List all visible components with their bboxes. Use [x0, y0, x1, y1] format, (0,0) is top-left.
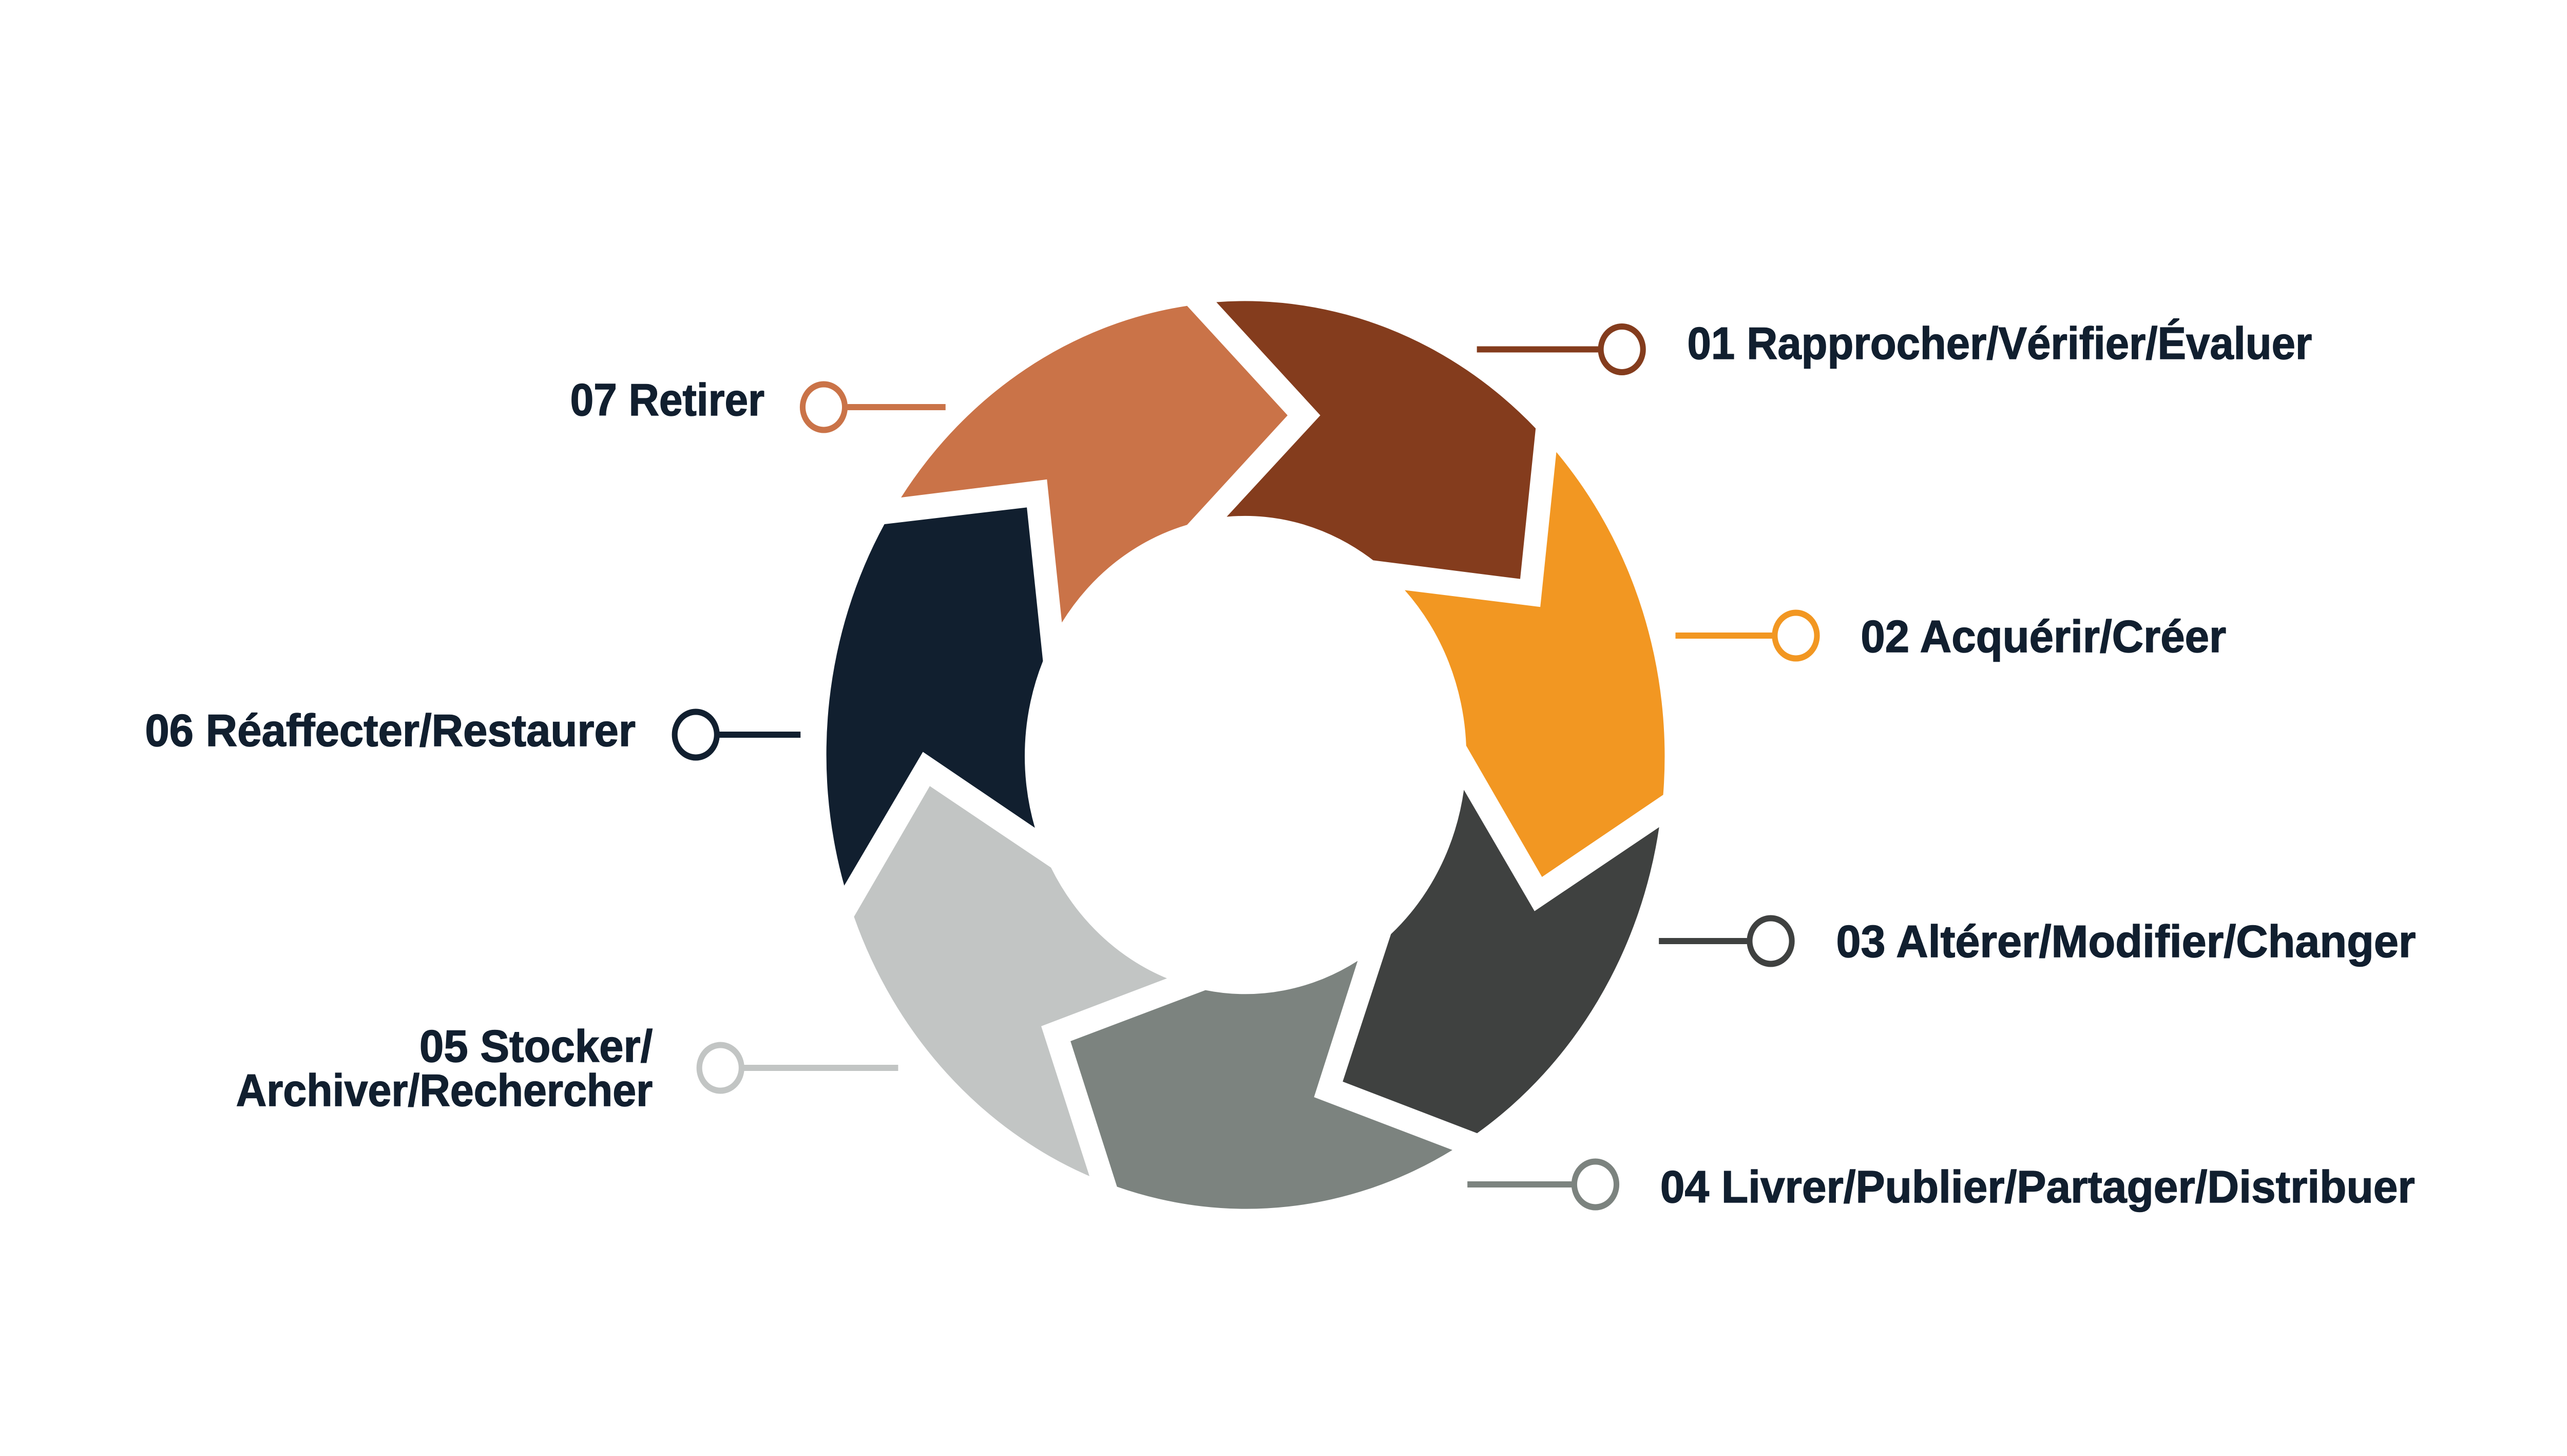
- label 03: 03 Altérer/Modifier/Changer: [1836, 916, 2416, 967]
- label 05: [236, 1021, 653, 1116]
- callout 06 connector: [675, 712, 800, 758]
- label 01: 01 Rapprocher/Vérifier/Évaluer: [1688, 318, 2312, 369]
- label 06: 06 Réaffecter/Restaurer: [145, 705, 636, 756]
- callout 02 connector: [1675, 613, 1817, 658]
- segment 05 light grey arrow: [854, 786, 1167, 1176]
- segment 04 grey arrow: [1070, 961, 1452, 1209]
- segment 01 brown arrow: [1216, 301, 1536, 579]
- callout 04 connector: [1467, 1161, 1617, 1208]
- segment 02 orange arrow: [1405, 452, 1664, 877]
- donut cycle chart: [827, 301, 1664, 1209]
- segment 06 navy arrow: [827, 507, 1043, 886]
- label 05: 05 Stocker/: [419, 1021, 653, 1071]
- callout 03 connector: [1659, 918, 1792, 964]
- segment 03 charcoal arrow: [1343, 790, 1659, 1133]
- label 04: 04 Livrer/Publier/Partager/Distribuer: [1660, 1161, 2415, 1212]
- segment 07 copper arrow: [901, 306, 1288, 622]
- label 05: Archiver/Rechercher: [236, 1065, 653, 1116]
- callout 05 connector: [699, 1045, 898, 1090]
- callout 01 connector: [1477, 327, 1643, 372]
- label 02: 02 Acquérir/Créer: [1861, 611, 2226, 662]
- label 07: 07 Retirer: [570, 374, 764, 425]
- callout 07 connector: [802, 384, 946, 430]
